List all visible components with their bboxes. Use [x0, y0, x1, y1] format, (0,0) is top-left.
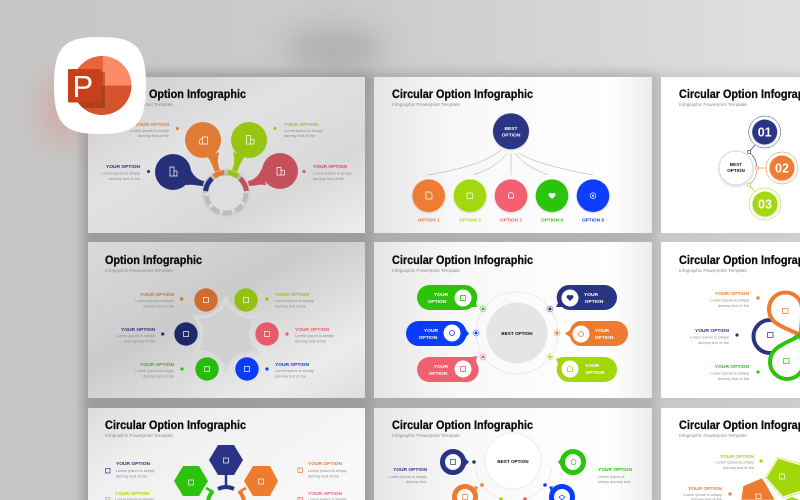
slide 8 title: Circular Option Infographic	[392, 418, 533, 432]
lime pill	[547, 354, 617, 382]
panel: slide 4, six-point ring	[88, 242, 365, 398]
slide 1 subtitle: Infographic Powerpoint Template	[105, 102, 173, 107]
option 02: 02	[775, 162, 789, 176]
orange label	[710, 291, 760, 308]
blue pill: OPTION	[419, 335, 438, 341]
option 4	[536, 179, 568, 224]
navy label: YOUR OPTION	[121, 327, 155, 333]
green label: Lorem Ipsum is	[598, 474, 625, 479]
navy pill	[547, 285, 617, 312]
green hexagon	[174, 466, 208, 496]
green ring	[558, 452, 584, 472]
red label: Lorem Ipsum is simply	[295, 333, 334, 338]
orange label: YOUR OPTION	[688, 486, 722, 492]
green label	[598, 467, 632, 484]
orange label: Lorem Ipsum is simply	[135, 298, 174, 303]
slide 4 subtitle: Infographic Powerpoint Template	[105, 268, 173, 273]
lime pill: OPTION	[586, 370, 605, 376]
lime label: YOUR OPTION	[275, 292, 309, 298]
slide 9 subtitle: Infographic Powerpoint Template	[679, 433, 747, 438]
red label: YOUR OPTION	[295, 327, 329, 333]
orange label	[135, 292, 183, 308]
option 5	[577, 179, 609, 224]
scalloped centre ring	[194, 298, 258, 371]
blue label: Lorem Ipsum is simply	[275, 368, 314, 373]
navy label	[116, 327, 164, 344]
option 3	[495, 179, 527, 224]
navy label	[106, 461, 155, 478]
best option circle: OPTION	[502, 132, 521, 138]
central ring	[204, 170, 248, 216]
connector lines	[747, 144, 767, 193]
red label: Lorem Ipsum is simply	[313, 170, 352, 176]
lime label	[106, 491, 154, 500]
option 03	[749, 188, 781, 220]
icon: P tile: P	[72, 69, 93, 104]
orange label	[130, 122, 179, 138]
navy label: dummy text of the	[116, 474, 147, 478]
icon glow	[40, 74, 84, 146]
panel: slide 7, hexagons	[88, 408, 365, 500]
option 3: OPTION 3	[500, 218, 522, 224]
option 1: OPTION 1	[418, 218, 440, 224]
blue pill: YOUR	[424, 328, 439, 334]
red option bubble	[248, 153, 298, 189]
lime pill: YOUR	[585, 363, 600, 369]
orange label: YOUR OPTION	[308, 461, 342, 467]
green pill	[417, 285, 486, 312]
panel: slide 3, numbered options	[661, 77, 800, 233]
navy label: Lorem Ipsum is simply	[116, 333, 155, 338]
green node	[195, 357, 219, 381]
navy label	[690, 328, 739, 345]
lime node	[234, 288, 258, 312]
green label: simply dummy text.	[598, 479, 631, 484]
lime pentagon	[765, 457, 800, 498]
slide 5 subtitle: Infographic Powerpoint Template	[392, 268, 460, 273]
green label: YOUR OPTION	[140, 362, 174, 368]
slide 2 title: Circular Option Infographic	[392, 87, 533, 101]
green pill: OPTION	[428, 299, 447, 305]
centre ring with connectors	[206, 475, 246, 500]
slide 6 subtitle: Infographic Powerpoint Template	[679, 268, 747, 273]
orange label: YOUR OPTION	[135, 122, 169, 128]
navy label: dummy text of the	[124, 338, 155, 344]
navy label: YOUR OPTION	[393, 467, 427, 473]
orange hexagon	[244, 466, 278, 496]
slide 7 title: Circular Option Infographic	[105, 418, 246, 432]
green label	[135, 362, 184, 378]
navy petal	[754, 320, 800, 353]
red label	[285, 327, 334, 344]
orange label: Lorem Ipsum is simply	[130, 128, 169, 133]
lime label: Lorem Ipsum is simply	[275, 298, 314, 303]
lime label	[715, 454, 763, 470]
best option badge: OPTION	[727, 168, 745, 173]
lime label: dummy text of the	[723, 465, 754, 470]
blue node	[235, 357, 259, 381]
red label	[302, 164, 352, 181]
orange node	[194, 288, 218, 312]
orange pill: OPTION	[595, 335, 614, 341]
navy label: Lorem Ipsum is simply	[690, 334, 729, 340]
navy label: Lorem Ipsum is simply	[101, 170, 140, 176]
slide 5 title: Circular Option Infographic	[392, 253, 533, 267]
navy label: Lorem Ipsum is simply	[388, 474, 427, 479]
navy label: YOUR OPTION	[116, 461, 150, 467]
blue pill	[406, 321, 479, 346]
orange label	[298, 461, 347, 478]
lime dot	[499, 497, 503, 500]
green label: YOUR OPTION	[715, 364, 749, 370]
blue label: YOUR OPTION	[275, 362, 309, 368]
panel: slide 5, speech-bubble pills	[374, 242, 652, 398]
lime label: Lorem Ipsum is simply	[284, 128, 323, 133]
orange label	[683, 486, 732, 500]
lime label: YOUR OPTION	[284, 122, 318, 128]
best option circle	[485, 433, 541, 489]
blue label	[265, 362, 314, 378]
green label: dummy text of the	[143, 374, 174, 378]
best option centre	[476, 292, 558, 374]
option 01: 01	[758, 126, 772, 140]
navy label: dummy text of the	[698, 340, 729, 345]
option 5: OPTION 5	[582, 218, 604, 224]
slide 7 subtitle: Infographic Powerpoint Template	[105, 433, 173, 438]
green label: YOUR OPTION	[598, 467, 632, 473]
navy pill: YOUR	[584, 292, 599, 298]
slide 2 subtitle: Infographic Powerpoint Template	[392, 102, 460, 107]
orange label: dummy text of the	[143, 304, 174, 308]
navy label: dummy text of the	[109, 176, 140, 181]
lime label: Lorem Ipsum is simply	[715, 460, 754, 464]
navy label: dummy text.	[406, 479, 427, 484]
small lime shape	[785, 497, 800, 500]
panel: slide 2, best option tree	[374, 77, 652, 233]
lime label: YOUR OPTION	[115, 491, 149, 497]
blue ring	[543, 483, 572, 500]
green label: dummy text of the	[718, 376, 749, 381]
green label: Lorem Ipsum is simply	[135, 368, 174, 373]
slide 4 title: Option Infographic	[105, 253, 202, 267]
orange label: dummy text of the	[138, 133, 169, 138]
navy label	[101, 164, 150, 181]
red pill	[417, 354, 486, 382]
red label: dummy text of the	[295, 338, 326, 344]
best option badge: BEST	[730, 162, 742, 167]
orange petal	[769, 293, 800, 335]
orange label: YOUR OPTION	[140, 292, 174, 298]
panel: slide 1, petal options	[88, 77, 365, 233]
slide 8 subtitle: Infographic Powerpoint Template	[392, 433, 460, 438]
lime label	[274, 122, 323, 138]
red dot	[523, 497, 527, 500]
panel: slide 8, ring options	[374, 408, 652, 500]
panel: slide 9, pentagons	[661, 408, 800, 500]
slide 3 subtitle: Infographic Powerpoint Template	[679, 102, 747, 107]
lime option bubble	[231, 122, 267, 172]
navy node	[174, 322, 198, 346]
navy hexagon	[209, 445, 243, 475]
navy pill: OPTION	[585, 299, 604, 305]
orange label: Lorem Ipsum is simply	[308, 468, 347, 473]
red pill: OPTION	[429, 371, 448, 377]
connecting arc	[475, 468, 552, 500]
blue label: dummy text of the	[275, 374, 306, 378]
lime label: YOUR OPTION	[720, 454, 754, 460]
navy option bubble	[155, 154, 204, 190]
option 2	[454, 179, 486, 224]
orange ring	[454, 483, 484, 500]
best option centre: BEST OPTION	[501, 331, 533, 336]
lime petal edge	[799, 306, 800, 335]
option 03: 03	[758, 198, 772, 212]
icon: PowerPoint app badge	[54, 37, 146, 134]
orange label: YOUR OPTION	[715, 291, 749, 297]
red label	[298, 491, 347, 500]
green label: Lorem Ipsum is simply	[710, 370, 749, 376]
red label: dummy text of the	[313, 176, 344, 181]
navy label: YOUR OPTION	[106, 164, 140, 170]
lime label: dummy text of the	[275, 304, 306, 308]
green pill: YOUR	[434, 292, 449, 298]
orange label: dummy text of the	[308, 474, 339, 478]
red label: YOUR OPTION	[313, 164, 347, 170]
best option circle: BEST OPTION	[497, 459, 529, 464]
navy label: YOUR OPTION	[695, 328, 729, 334]
lime label	[265, 292, 314, 308]
navy label: Lorem Ipsum is simply	[116, 468, 155, 473]
icon: pie circle	[78, 56, 132, 115]
orange option bubble	[185, 122, 221, 172]
navy label	[388, 467, 427, 484]
best option circle: BEST	[504, 126, 518, 132]
orange label: Lorem Ipsum is simply	[710, 298, 749, 302]
option 1	[412, 179, 445, 224]
lime label: dummy text of the	[284, 133, 315, 138]
option 2: OPTION 2	[459, 218, 481, 224]
orange label: dummy text of the	[718, 303, 749, 308]
green petal	[770, 335, 800, 379]
orange label: Lorem Ipsum is simply	[683, 492, 722, 497]
best option circle	[493, 113, 529, 149]
connector curves	[428, 149, 593, 175]
navy ring	[442, 452, 476, 472]
orange pentagon	[741, 478, 775, 500]
option 4: OPTION 4	[541, 218, 563, 224]
panel: slide 6, petal outlines	[661, 242, 800, 398]
green label	[710, 364, 760, 381]
orange pill	[554, 321, 628, 346]
option 01	[749, 116, 781, 148]
red label: YOUR OPTION	[308, 491, 342, 497]
slide 1 title: Circular Option Infographic	[105, 87, 246, 101]
orange pill: YOUR	[595, 328, 610, 334]
red pill: YOUR	[434, 364, 449, 370]
best option badge	[719, 151, 753, 185]
red node	[255, 322, 279, 346]
option 02	[766, 152, 798, 184]
